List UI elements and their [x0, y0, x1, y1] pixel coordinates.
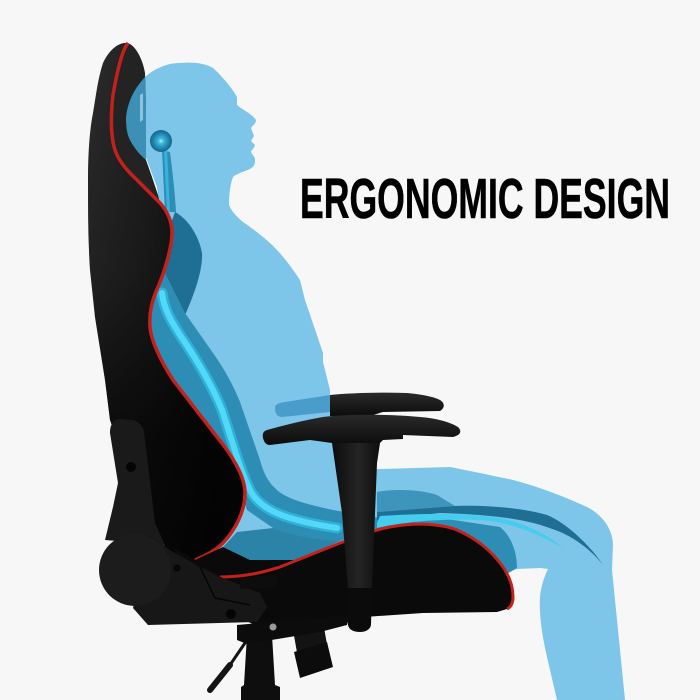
recline frame plate: [133, 535, 277, 625]
far armrest: [275, 393, 444, 417]
gas lift column: [241, 635, 280, 700]
backrest red piping: [112, 43, 245, 560]
recline pivot cover: [99, 534, 171, 606]
human silhouette: [126, 63, 625, 700]
upper spine: [162, 150, 176, 212]
seat red piping: [220, 524, 513, 609]
seat back junction: [170, 545, 297, 585]
spine glow highlight: [162, 293, 337, 528]
thigh bone cyan tail: [377, 514, 563, 548]
backrest side bracket: [105, 419, 165, 545]
spine band: [146, 273, 380, 541]
mechanism screw: [270, 624, 276, 630]
adjustment lever: [210, 640, 247, 690]
right seat cushion through thigh: [370, 518, 517, 575]
headrest inner panel: [112, 43, 160, 203]
tilt knob: [293, 622, 333, 678]
far seat cushion dome: [377, 490, 455, 512]
thigh bone dark tail: [377, 506, 603, 565]
armrest post: [332, 443, 380, 632]
seat mesh seen through body: [223, 528, 340, 560]
near armrest pad: [263, 415, 460, 445]
backrest: [88, 43, 245, 560]
under seat mechanism: [237, 615, 350, 644]
head overlap on headrest: [126, 77, 146, 160]
seat cushion: [200, 524, 513, 627]
neck joint ball: [150, 130, 172, 152]
far side wing of backrest: [160, 212, 202, 315]
